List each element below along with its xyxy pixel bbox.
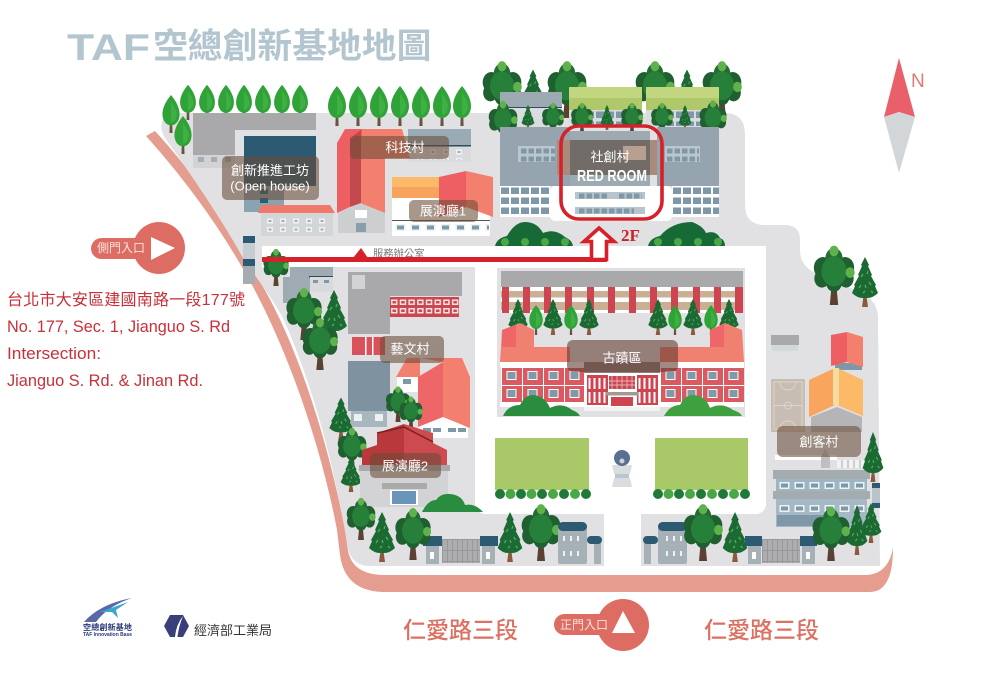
logo: TAF Innovation Base bbox=[83, 598, 132, 638]
label: 創新推進工坊: (Open house) bbox=[230, 178, 310, 194]
trees: west edge bbox=[329, 398, 367, 492]
label: 創客村 bbox=[777, 426, 861, 457]
building: performance hall 2 bbox=[359, 424, 483, 512]
bushes below 社創村 bbox=[495, 222, 725, 246]
trees: north-east bbox=[814, 246, 878, 307]
label: 社創村 RED ROOM: 社創村 bbox=[590, 150, 630, 164]
building: red roof dorm bbox=[258, 205, 335, 236]
building: 社創村 centre bbox=[550, 131, 672, 221]
title: TAF bbox=[67, 27, 150, 68]
building: historic rear wing bbox=[501, 271, 743, 313]
tree row: north-west bbox=[162, 85, 308, 154]
label: 科技村 bbox=[350, 136, 449, 159]
bottom row east: small building bbox=[643, 522, 687, 564]
road name: west: 仁愛路三段 bbox=[403, 611, 518, 645]
building: 創客村 group bbox=[771, 332, 867, 468]
entrance: side gate bbox=[91, 222, 185, 274]
label: 展演廳1 bbox=[409, 200, 478, 222]
building: 社創村 wings bbox=[500, 127, 719, 217]
building: historic main hall bbox=[500, 323, 744, 416]
label: 科技村: 科技村 bbox=[385, 140, 425, 155]
campus ground bbox=[161, 113, 880, 566]
lawns bbox=[495, 438, 750, 499]
tree: side gate bbox=[263, 249, 289, 286]
building: performance hall 1 bbox=[392, 171, 493, 236]
address block: No. 177, Sec. 1, Jianguo S. Rd bbox=[7, 317, 230, 336]
text: 服務辦公室 bbox=[353, 247, 424, 260]
gate: side bbox=[243, 236, 255, 284]
highlight: red room frame bbox=[561, 126, 662, 219]
label: 展演廳1: 展演廳1 bbox=[420, 204, 466, 218]
logo: TAF Innovation Base: 空總創新基地 bbox=[83, 622, 132, 632]
label: 創新推進工坊 bbox=[222, 156, 319, 200]
address block: Intersection: bbox=[7, 344, 101, 363]
monument bbox=[612, 450, 632, 487]
building: west of arts block bbox=[283, 267, 333, 303]
label: 古蹟區: 古蹟區 bbox=[602, 350, 642, 366]
label: 古蹟區 bbox=[567, 340, 678, 372]
bottom row east: gate and trees bbox=[684, 432, 883, 564]
road name: east: 仁愛路三段 bbox=[704, 611, 819, 645]
label: 社創村 RED ROOM bbox=[557, 140, 657, 185]
back buildings bbox=[500, 87, 719, 128]
label: 藝文村 bbox=[380, 336, 444, 363]
icon: north compass bbox=[884, 58, 925, 173]
trees: west bbox=[286, 288, 347, 370]
route arrow: to RED ROOM bbox=[262, 228, 614, 262]
entrance: main gate bbox=[554, 599, 649, 651]
road: salmon curb bbox=[146, 131, 893, 592]
building: 科技村 bbox=[337, 129, 471, 233]
building: 藝文村 bbox=[348, 272, 470, 438]
address block: Jianguo S. Rd. & Jinan Rd. bbox=[7, 371, 203, 390]
text: 2F: 2F bbox=[621, 226, 640, 245]
logo: TAF Innovation Base: TAF Innovation Base bbox=[83, 632, 132, 638]
tree row: north bbox=[328, 86, 471, 126]
bottom row west: small building bbox=[558, 522, 602, 564]
icon: north compass: N bbox=[911, 71, 925, 92]
entrance: side gate: 側門入口 bbox=[97, 241, 145, 255]
label: 創新推進工坊: 創新推進工坊 bbox=[231, 163, 309, 178]
label: 藝文村: 藝文村 bbox=[390, 342, 430, 356]
logo: Industrial Development Bureau bbox=[164, 615, 272, 638]
front small trees bbox=[489, 100, 727, 143]
label: 展演廳2: 展演廳2 bbox=[382, 458, 428, 474]
label: 展演廳2 bbox=[370, 453, 441, 478]
building: south-east dorm bbox=[773, 470, 880, 527]
trees: 藝文村 courtyard bbox=[386, 386, 423, 430]
text: 服務辦公室: 服務辦公室 bbox=[373, 247, 424, 260]
label: 社創村 RED ROOM: RED ROOM bbox=[577, 168, 647, 185]
label: 創客村: 創客村 bbox=[799, 434, 839, 450]
title: 空總創新基地地圖 bbox=[153, 19, 431, 69]
building: open house workshop bbox=[193, 113, 316, 212]
historic block ground bbox=[497, 268, 745, 417]
address block: 台北市大安區建國南路一段177號 bbox=[7, 291, 245, 309]
entrance: main gate: 正門入口 bbox=[560, 618, 608, 632]
address block bbox=[7, 291, 245, 390]
bottom row west: gate and trees bbox=[347, 498, 561, 564]
internal white roads bbox=[262, 246, 766, 570]
logo: Industrial Development Bureau: 經濟部工業局 bbox=[194, 623, 272, 638]
trees: historic courtyard bbox=[508, 299, 739, 335]
trees behind 社創村 bbox=[483, 61, 742, 118]
